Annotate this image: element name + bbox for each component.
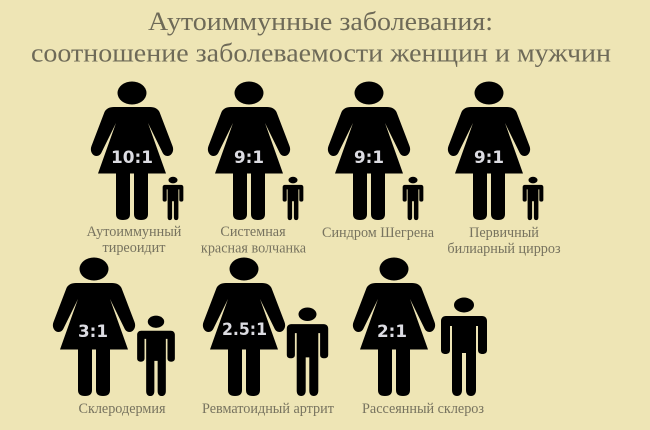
panel: systemic lupus 9:1: красная волчанка xyxy=(201,240,307,256)
panel: autoimmune thyroiditis 10:1: Аутоиммунный xyxy=(87,224,182,240)
panel: systemic lupus 9:1: Системная xyxy=(220,224,286,240)
title: Аутоиммунные заболевания: xyxy=(148,6,493,36)
panel: rheumatoid arthritis 2.5:1: Ревматоидный артрит xyxy=(202,401,334,417)
title: соотношение заболеваемости женщин и мужчин xyxy=(31,38,611,68)
panel: primary biliary cirrhosis 9:1: билиарный цирроз xyxy=(447,241,561,257)
title xyxy=(31,6,611,68)
panel: multiple sclerosis 2:1: 2:1 xyxy=(377,322,407,341)
panel: scleroderma 3:1: Склеродермия xyxy=(78,401,166,417)
panel: systemic lupus 9:1 xyxy=(201,82,307,256)
panel: Sjogren syndrome 9:1: 9:1 xyxy=(354,148,384,167)
panel: autoimmune thyroiditis 10:1: 10:1 xyxy=(111,148,153,167)
panel: systemic lupus 9:1: 9:1 xyxy=(234,148,264,167)
panel: primary biliary cirrhosis 9:1: 9:1 xyxy=(474,148,504,167)
panel: multiple sclerosis 2:1: Рассеянный склероз xyxy=(362,401,484,417)
panel: scleroderma 3:1 xyxy=(53,258,175,417)
panel: autoimmune thyroiditis 10:1 xyxy=(87,82,183,256)
panel: Sjogren syndrome 9:1 xyxy=(322,82,435,241)
panel: Sjogren syndrome 9:1: Синдром Шегрена xyxy=(322,225,435,241)
panel: multiple sclerosis 2:1 xyxy=(353,258,487,417)
panel: rheumatoid arthritis 2.5:1 xyxy=(202,258,334,417)
panel: rheumatoid arthritis 2.5:1: 2.5:1 xyxy=(222,320,267,339)
panel: primary biliary cirrhosis 9:1 xyxy=(447,82,561,257)
panel: scleroderma 3:1: 3:1 xyxy=(78,322,108,341)
panel: autoimmune thyroiditis 10:1: тиреоидит xyxy=(103,240,165,256)
panel: primary biliary cirrhosis 9:1: Первичный xyxy=(469,225,539,241)
